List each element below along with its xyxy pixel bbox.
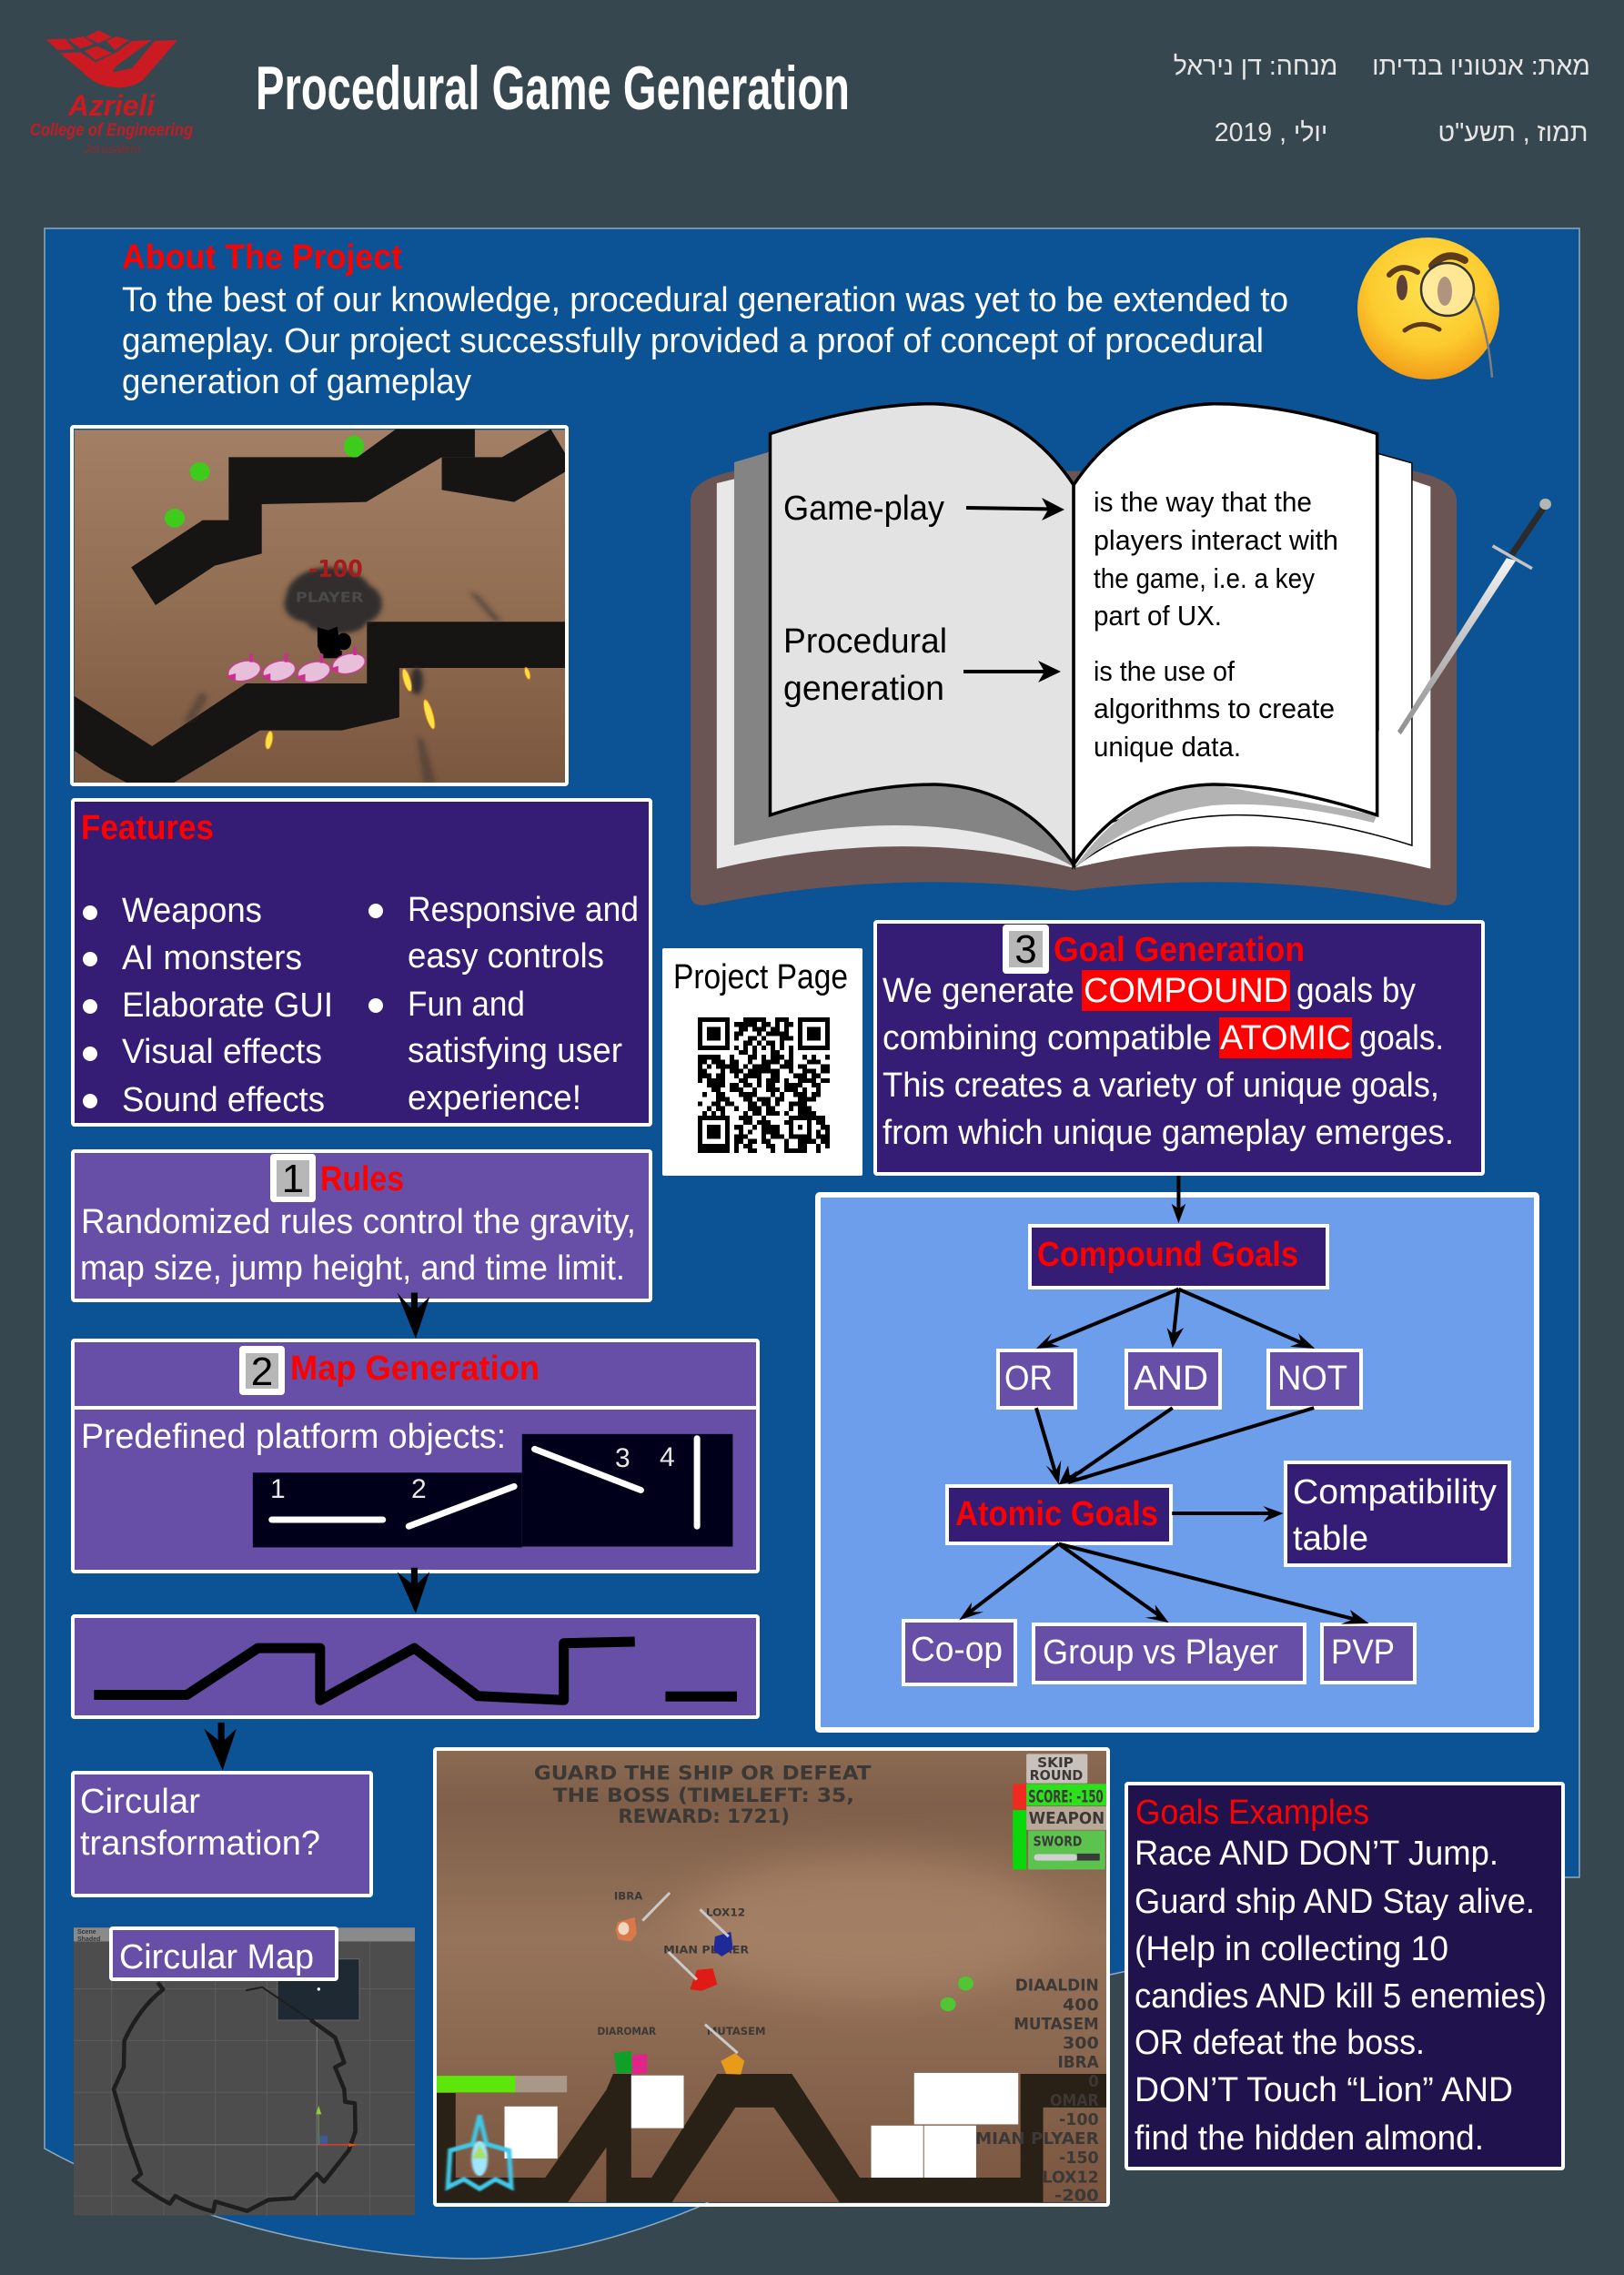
damage text: -100 (308, 555, 363, 582)
ground platforms (436, 2074, 1106, 2202)
platform objects image (253, 1434, 732, 1547)
goal generation body: goals. (1359, 1019, 1444, 1057)
scoreboard (975, 1977, 1099, 2206)
node: compatibility table (1286, 1462, 1509, 1565)
about body: To the best of our knowledge, procedural generation was yet to be extended to (122, 281, 1288, 319)
goal generation body: goals by (1296, 972, 1416, 1010)
right page definitions: algorithms to create (1094, 693, 1335, 724)
fire bullets (264, 667, 531, 750)
HUD (1026, 1754, 1087, 1784)
game screenshot: guard the ship level: SWORD (1034, 1834, 1082, 1850)
scoreboard: -150 (1059, 2149, 1099, 2168)
goals examples list (1135, 1835, 1547, 2158)
game screenshot: cave level: PLAYER (296, 590, 364, 605)
badge 1: 1 (282, 1157, 304, 1201)
circular map label (111, 1928, 337, 1979)
node: compatibility table: table (1293, 1520, 1368, 1558)
badge 1 (270, 1154, 316, 1202)
panel: goals examples (1126, 1784, 1563, 2169)
scoreboard: OMAR (1050, 2092, 1099, 2110)
badge 3 (1003, 925, 1049, 974)
platforms (75, 430, 565, 784)
goals examples list: find the hidden almond. (1135, 2119, 1484, 2158)
left page terms (783, 490, 947, 708)
right page definitions: the game, i.e. a key (1094, 562, 1315, 594)
about heading: About The Project (122, 238, 402, 277)
circular map screenshot: Scene (77, 1929, 96, 1936)
authors and date in Hebrew: תמוז , תשע"ט (1438, 118, 1588, 147)
node: co-op (903, 1621, 1015, 1684)
screenshot frame (435, 1749, 1108, 2205)
platform objects image: 1 (270, 1474, 286, 1504)
scoreboard: MIAN PLYAER (975, 2130, 1099, 2149)
features left list: AI monsters (122, 939, 302, 977)
features right list: Fun and (408, 986, 525, 1024)
health bar (436, 2076, 515, 2092)
goals examples list: candies AND kill 5 enemies) (1135, 1977, 1547, 2016)
screenshot frame (72, 427, 567, 784)
panel: goal generation (875, 922, 1483, 1174)
node: co-op: Co-op (911, 1631, 1003, 1669)
scoreboard: MUTASEM (1014, 2015, 1099, 2034)
about body: gameplay. Our project successfully provided a proof of concept of procedural (122, 322, 1264, 360)
goals examples list: (Help in collecting 10 (1135, 1930, 1448, 1968)
player names (598, 1890, 766, 2037)
player sprites (614, 1917, 744, 2075)
left page terms: Procedural (783, 622, 947, 661)
left page (771, 404, 1074, 864)
goal generation body: from which unique gameplay emerges. (883, 1114, 1454, 1152)
node: PVP (1322, 1624, 1415, 1683)
goals examples heading: Goals Examples (1135, 1794, 1369, 1832)
goal generation body: COMPOUND (1084, 972, 1288, 1010)
features left list (83, 892, 333, 1119)
panel: map generation (73, 1340, 758, 1572)
goal generation body: This creates a variety of unique goals, (883, 1067, 1439, 1105)
badge 2: 2 (251, 1350, 273, 1394)
left page terms: generation (783, 670, 944, 708)
goal generation body: We generate (883, 972, 1074, 1010)
logo: Azrieli College of Engineering: College of Engineering (30, 121, 193, 140)
green pickups (958, 1977, 973, 1990)
flow arrows (959, 1176, 1369, 1624)
features right list (368, 891, 639, 1117)
map generation heading: Map Generation (290, 1350, 540, 1388)
panel: circular transformation (73, 1773, 371, 1896)
right page definitions: unique data. (1094, 731, 1241, 763)
arrow: generated map to circular transformation (204, 1723, 237, 1770)
node: group vs player (1034, 1624, 1305, 1683)
badge 3: 3 (1014, 927, 1037, 972)
icon: sword (1397, 499, 1551, 734)
game screenshot: guard the ship level (435, 1749, 1108, 2206)
about the project text (122, 238, 1288, 401)
features left list: Sound effects (122, 1081, 325, 1119)
circular map screenshot (74, 1927, 415, 2215)
game screenshot: guard the ship level: WEAPON (1029, 1810, 1105, 1828)
goal generation body (883, 970, 1454, 1152)
goals examples list: DON’T Touch “Lion” AND (1135, 2071, 1513, 2109)
authors and date in Hebrew: יולי , 2019 (1215, 118, 1327, 147)
arrow: map generation to generated map (398, 1568, 429, 1613)
right page (1074, 404, 1377, 864)
white blocks (505, 2073, 1018, 2178)
scoreboard: -200 (1054, 2187, 1099, 2206)
platform objects image: 2 (411, 1474, 427, 1504)
panel: rules (73, 1151, 651, 1300)
smoke (184, 567, 502, 784)
features right list: experience! (408, 1079, 581, 1117)
player names: DIAROMAR (598, 2026, 656, 2037)
panel: features (73, 800, 651, 1125)
title: Procedural Game Generation (256, 54, 850, 123)
logo: Azrieli College of Engineering: Jerusalem (83, 142, 141, 156)
features left list: Elaborate GUI (122, 986, 333, 1025)
features left list: Weapons (122, 892, 262, 930)
text: SCORE: -150 (1028, 1787, 1104, 1807)
rules body (80, 1203, 636, 1288)
player names: LOX12 (706, 1906, 745, 1919)
player names: IBRA (614, 1890, 643, 1903)
logo: Azrieli College of Engineering (30, 30, 193, 156)
green pickups (165, 436, 364, 528)
node: NOT (1268, 1350, 1361, 1408)
node: AND: AND (1134, 1360, 1208, 1398)
platform objects image: 4 (660, 1442, 675, 1472)
game screenshot: guard the ship level: THE BOSS (TIMELEFT: 35, (553, 1784, 854, 1807)
node: compound goals: Compound Goals (1037, 1236, 1298, 1274)
circular map screenshot: Shaded (77, 1936, 100, 1943)
goals examples list: OR defeat the boss. (1135, 2024, 1425, 2062)
right page definitions (1094, 486, 1338, 763)
node: OR (998, 1350, 1075, 1408)
features left list: Visual effects (122, 1033, 322, 1071)
panel: circular transformation: Circular (80, 1783, 200, 1821)
scoreboard: DIAALDIN (1015, 1977, 1099, 1996)
scoreboard: IBRA (1057, 2053, 1099, 2072)
features right list: satisfying user (408, 1032, 622, 1070)
scoreboard: 300 (1063, 2034, 1099, 2053)
node: compatibility table: Compatibility (1293, 1473, 1497, 1512)
left page terms: Game-play (783, 490, 944, 528)
right page shadow (1074, 784, 1377, 867)
node: group vs player: Group vs Player (1043, 1633, 1278, 1672)
node: OR: OR (1004, 1360, 1053, 1398)
rules body: Randomized rules control the gravity, (81, 1203, 636, 1241)
rules heading: Rules (320, 1160, 404, 1198)
features right list: Responsive and (408, 891, 639, 929)
arrow: game-play (966, 498, 1064, 521)
scoreboard: 400 (1063, 1996, 1099, 2015)
QR code (698, 1020, 830, 1150)
game screenshot: cave level (72, 427, 567, 784)
swords (642, 1893, 738, 2053)
goals examples list: Race AND DON’T Jump. (1135, 1835, 1498, 1873)
panel: project page QR (662, 948, 862, 1176)
panel: goal flow diagram (818, 1176, 1537, 1730)
game screenshot: guard the ship level: ROUND (1030, 1767, 1083, 1784)
right page definitions: is the way that the (1094, 486, 1312, 518)
about body (122, 281, 1288, 401)
scoreboard: LOX12 (1043, 2169, 1099, 2187)
lower pages (717, 466, 1074, 869)
arrow: procedural generation (963, 661, 1061, 682)
sky highlight (681, 1856, 1061, 1997)
game screenshot: guard the ship level: REWARD: 1721) (618, 1805, 790, 1828)
ship (448, 2116, 511, 2189)
icon: monocle face emoji (1357, 238, 1499, 379)
badge 2 (239, 1346, 285, 1395)
goals examples list: Guard ship AND Stay alive. (1135, 1883, 1535, 1921)
node: atomic goals (947, 1486, 1171, 1543)
player names: MIAN PLYAER (663, 1944, 749, 1956)
scoreboard: -100 (1059, 2111, 1099, 2129)
goal generation body: ATOMIC (1220, 1019, 1351, 1057)
rules body: map size, jump height, and time limit. (80, 1249, 625, 1288)
QR label: Project Page (673, 958, 848, 996)
predefined text: Predefined platform objects: (81, 1418, 506, 1456)
node: PVP: PVP (1331, 1633, 1395, 1672)
logo text: Azrieli (67, 89, 156, 122)
about body: generation of gameplay (122, 363, 471, 401)
goal generation body: combining compatible (883, 1019, 1212, 1057)
scoreboard: 0 (1088, 2073, 1099, 2091)
features right list: easy controls (408, 937, 604, 976)
arrow: rules to map generation (398, 1293, 429, 1339)
goal generation heading: Goal Generation (1054, 931, 1305, 969)
node: AND (1126, 1350, 1220, 1408)
right page definitions: players interact with (1094, 524, 1338, 556)
pink creatures (225, 650, 368, 685)
platform objects image: 3 (615, 1443, 630, 1473)
authors and date in Hebrew: מאת: אנטוניו בנדיתו (1372, 52, 1590, 81)
goal text: GUARD THE SHIP OR DEFEAT (534, 1762, 872, 1785)
node: atomic goals: Atomic Goals (955, 1495, 1158, 1533)
circular map label: Circular Map (119, 1938, 314, 1977)
authors and date in Hebrew (1174, 52, 1590, 147)
logo mark (46, 30, 177, 87)
right page definitions: is the use of (1094, 655, 1235, 687)
node: compound goals (1030, 1226, 1327, 1288)
right page definitions: part of UX. (1094, 600, 1222, 632)
node: NOT: NOT (1277, 1360, 1347, 1398)
panel: generated map line (73, 1616, 758, 1717)
authors and date in Hebrew: מנחה: דן ניראל (1174, 52, 1337, 81)
features heading: Features (81, 809, 214, 847)
panel: circular transformation: transformation? (80, 1825, 320, 1863)
open book with definitions (691, 404, 1457, 905)
player silhouette (318, 627, 351, 658)
game screenshot: guard the ship level: SKIP (1037, 1754, 1074, 1771)
book cover (691, 471, 1457, 905)
player names: MUTASEM (707, 2026, 766, 2037)
